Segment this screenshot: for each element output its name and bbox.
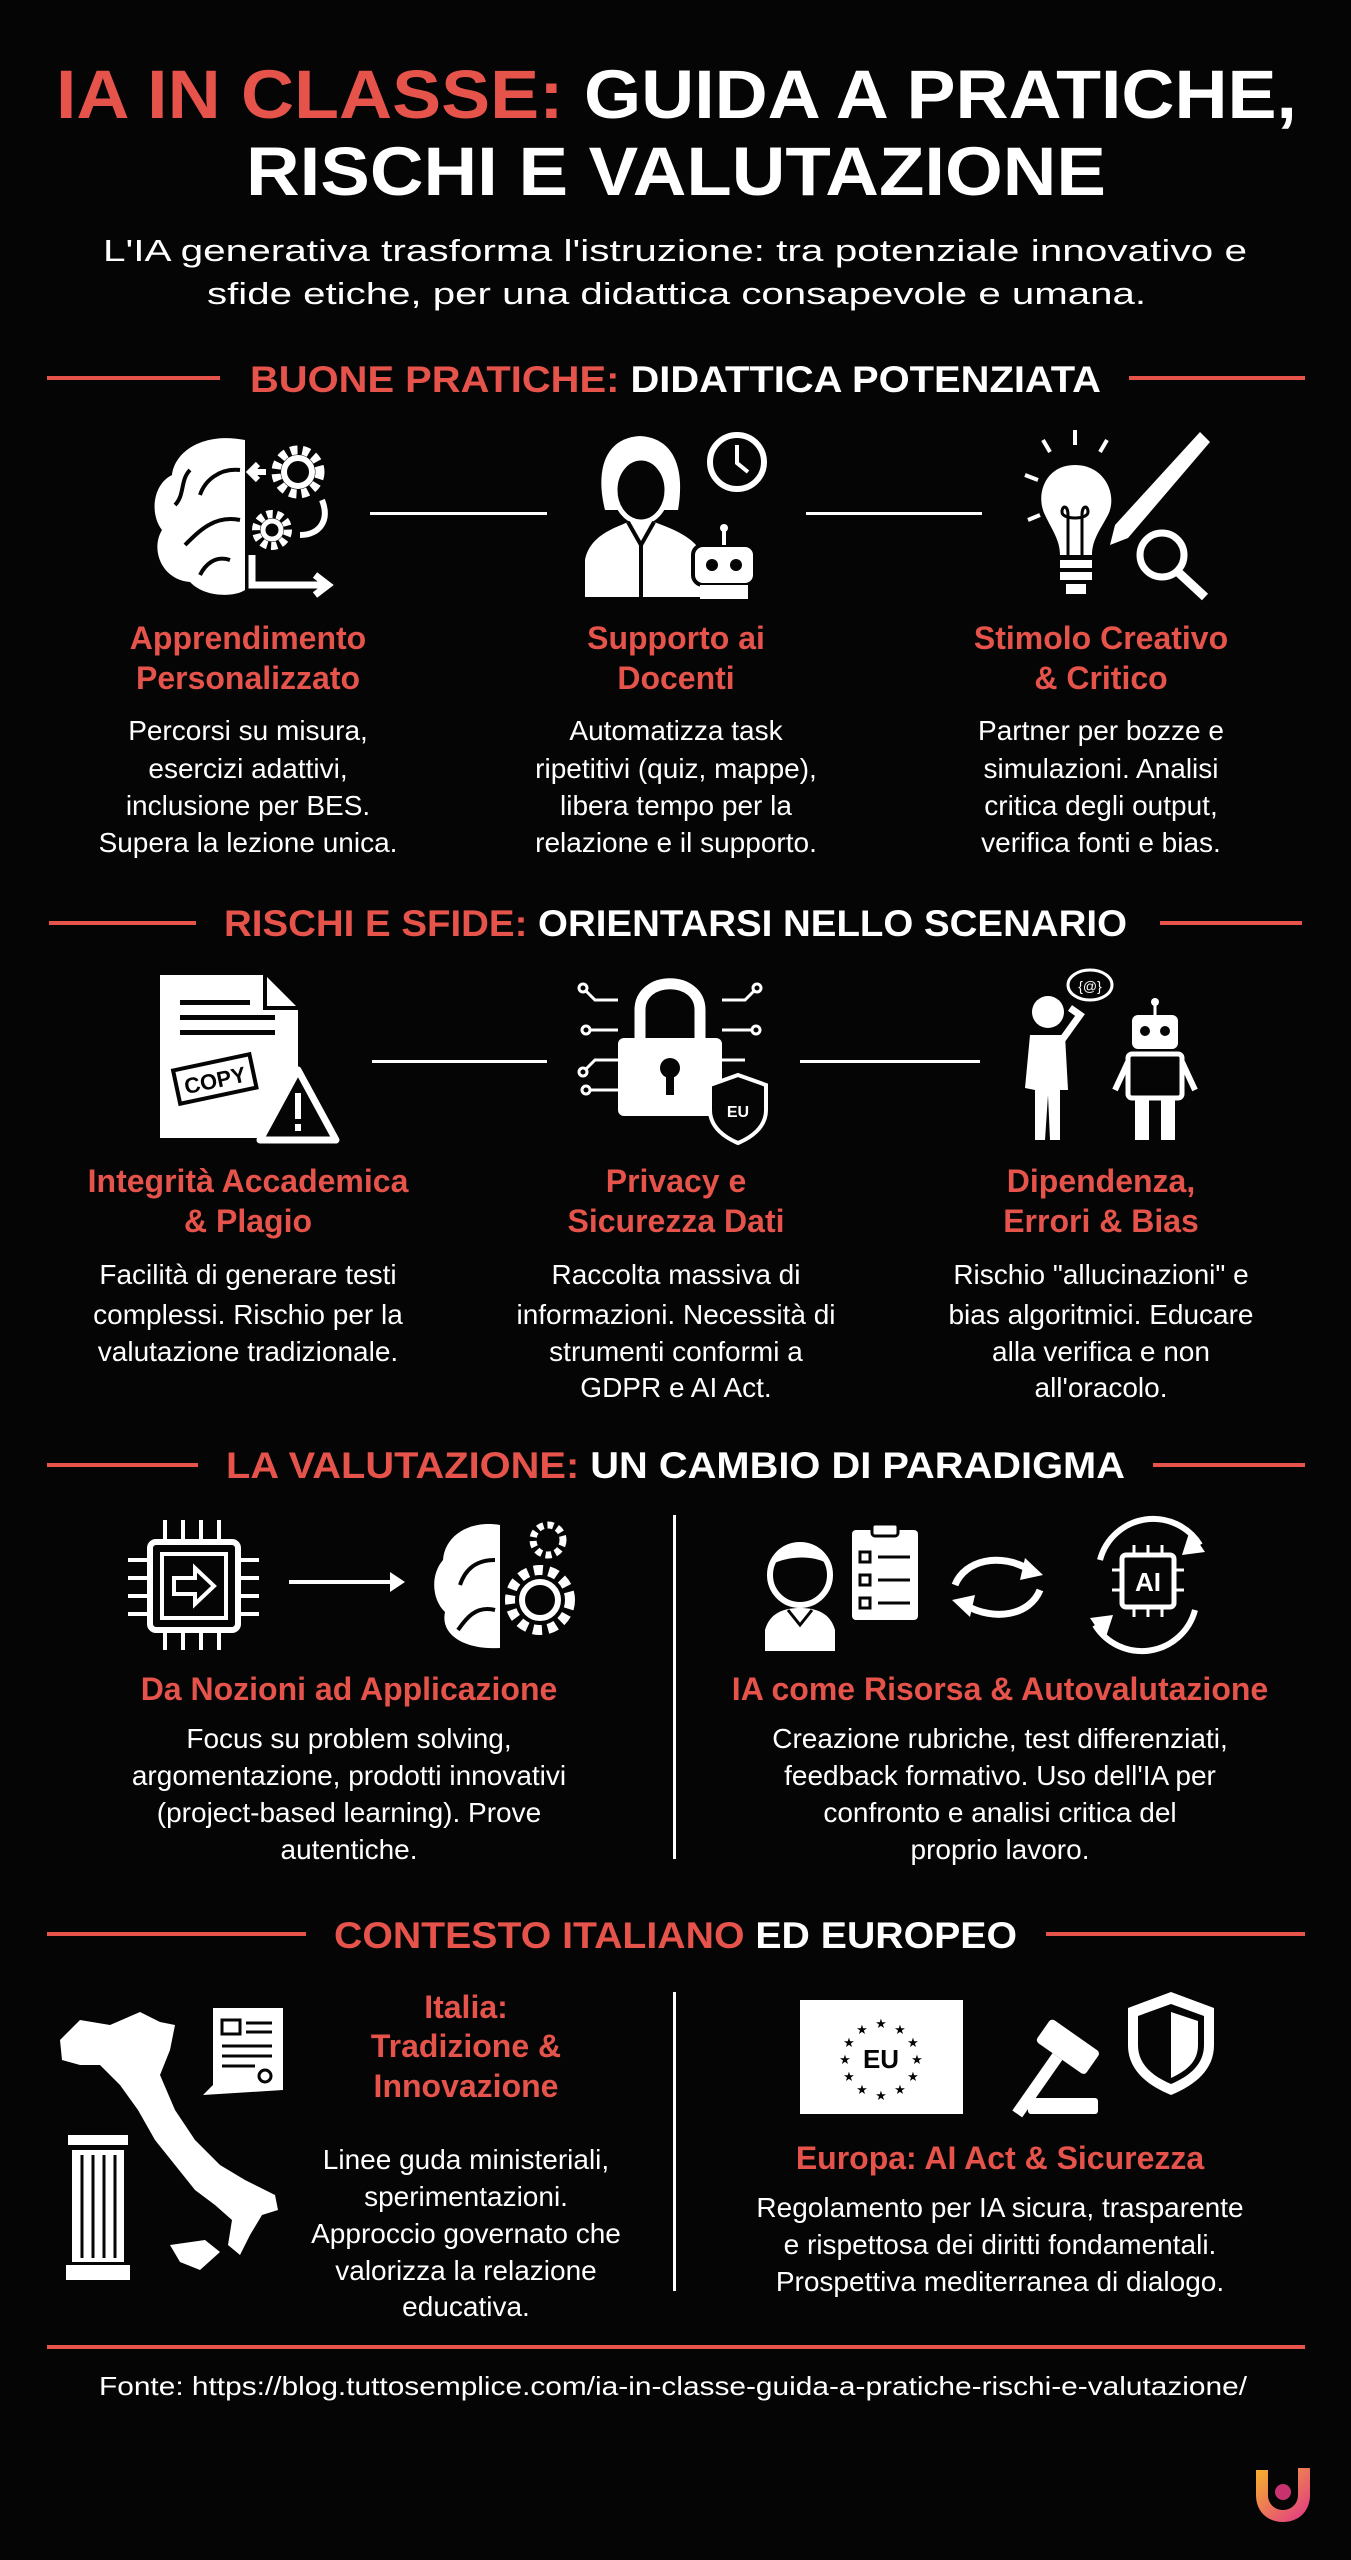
- column: stimolo creativo: Partner per bozze e: [978, 715, 1224, 746]
- column: privacy: Sicurezza Dati: [568, 1203, 784, 1239]
- icon: EU flag gavel shield: ★: [843, 2035, 855, 2050]
- column: integrità accademica: Facilità di generare testi: [99, 1259, 397, 1290]
- icon: student checklist cycle AI: AI: [1135, 1567, 1161, 1597]
- section heading: valutazione: LA VALUTAZIONE: UN CAMBIO DI PARADIGMA: [226, 1445, 1125, 1486]
- icon: padlock circuit EU: EU: [727, 1104, 749, 1121]
- column: dipendenza: all'oracolo.: [1035, 1372, 1167, 1403]
- logo: [1256, 2468, 1310, 2522]
- section heading: buone pratiche: [47, 359, 1305, 400]
- section heading: rischi e sfide: RISCHI E SFIDE: ORIENTARSI NELLO SCENARIO: [224, 903, 1127, 944]
- section heading: contesto: [47, 1915, 1305, 1956]
- column: dipendenza: [948, 1163, 1254, 1403]
- section heading: contesto: CONTESTO ITALIANO ED EUROPEO: [334, 1915, 1017, 1956]
- column: apprendimento personalizzato: Personalizzato: [136, 660, 360, 696]
- column: privacy: Privacy e: [606, 1163, 746, 1199]
- column: dipendenza: alla verifica e non: [992, 1336, 1210, 1367]
- column: IA come risorsa: Creazione rubriche, test differenziati,: [772, 1723, 1228, 1754]
- column: stimolo creativo: [974, 620, 1228, 858]
- icon: EU flag gavel shield: ★: [875, 2016, 887, 2031]
- icon: confused person and robot: [1025, 970, 1195, 1140]
- icon: chip arrow brain: [128, 1520, 570, 1650]
- column: europa: [756, 2140, 1244, 2297]
- icon: EU flag gavel shield: ★: [894, 2082, 906, 2097]
- title: IA IN CLASSE: GUIDA A PRATICHE,: [56, 56, 1297, 133]
- icon: EU flag gavel shield: ★: [856, 2082, 868, 2097]
- column: integrità accademica: & Plagio: [184, 1203, 312, 1239]
- column: dipendenza: bias algoritmici. Educare: [948, 1299, 1254, 1330]
- column: apprendimento personalizzato: esercizi adattivi,: [148, 753, 348, 784]
- column: integrità accademica: Integrità Accademica: [88, 1163, 409, 1199]
- column: IA come risorsa: IA come Risorsa & Autovalutazione: [732, 1671, 1268, 1707]
- connector: [800, 1060, 980, 1063]
- column: apprendimento personalizzato: [99, 620, 397, 858]
- column: IA come risorsa: [732, 1671, 1268, 1865]
- subtitle: L'IA generativa trasforma l'istruzione: tra potenziale innovativo e: [103, 233, 1247, 268]
- section heading: valutazione: [47, 1445, 1305, 1486]
- icon: lightbulb pencil magnifier: [1025, 430, 1210, 597]
- column: supporto ai docenti: [535, 620, 817, 858]
- icon: brain with gears: [155, 438, 328, 595]
- column: apprendimento personalizzato: inclusione per BES.: [126, 790, 370, 821]
- column: dipendenza: Errori & Bias: [1003, 1203, 1199, 1239]
- icon: EU flag gavel shield: ★: [907, 2035, 919, 2050]
- column: italia: Approccio governato che: [311, 2218, 621, 2249]
- column: italia: Tradizione &: [371, 2028, 561, 2064]
- icon: copy document warning: [160, 975, 336, 1140]
- icon: teacher with robot and clock: [585, 435, 764, 599]
- column: stimolo creativo: verifica fonti e bias.: [981, 827, 1221, 858]
- column: italia: sperimentazioni.: [364, 2181, 568, 2212]
- column: italia: valorizza la relazione: [335, 2255, 597, 2286]
- column: italia: [311, 1989, 621, 2322]
- column: privacy: informazioni. Necessità di: [516, 1299, 836, 1330]
- column: IA come risorsa: confronto e analisi critica del: [823, 1797, 1177, 1828]
- column: supporto ai docenti: libera tempo per la: [560, 790, 792, 821]
- column: italia: educativa.: [402, 2291, 530, 2322]
- column: privacy: GDPR e AI Act.: [580, 1372, 772, 1403]
- icon: confused person and robot: {@}: [1078, 978, 1102, 994]
- icon: EU flag gavel shield: ★: [911, 2052, 923, 2067]
- column: dipendenza: Rischio "allucinazioni" e: [953, 1259, 1249, 1290]
- icon: padlock circuit EU: [579, 984, 766, 1143]
- icon: EU flag gavel shield: [800, 1992, 1214, 2133]
- subtitle: sfide etiche, per una didattica consapevole e umana.: [207, 276, 1146, 311]
- column: italia: Italia:: [424, 1989, 508, 2025]
- column: da nozioni ad applicazione: [132, 1671, 566, 1865]
- column: supporto ai docenti: ripetitivi (quiz, mappe),: [535, 753, 817, 784]
- column: IA come risorsa: feedback formativo. Uso dell'IA per: [784, 1760, 1216, 1791]
- connector: [372, 1060, 547, 1063]
- icon: italy map column scroll: [60, 2008, 283, 2280]
- column: privacy: [516, 1163, 836, 1403]
- icon: EU flag gavel shield: ★: [843, 2069, 855, 2084]
- column: stimolo creativo: simulazioni. Analisi: [984, 753, 1218, 784]
- column: integrità accademica: [88, 1163, 409, 1367]
- column: apprendimento personalizzato: Supera la lezione unica.: [99, 827, 397, 858]
- column: privacy: Raccolta massiva di: [552, 1259, 800, 1290]
- title: [56, 56, 1297, 210]
- icon: EU flag gavel shield: ★: [907, 2069, 919, 2084]
- column: da nozioni ad applicazione: argomentazione, prodotti innovativi: [132, 1760, 566, 1791]
- section heading: buone pratiche: BUONE PRATICHE: DIDATTICA POTENZIATA: [250, 359, 1101, 400]
- column: supporto ai docenti: Supporto ai: [587, 620, 765, 656]
- icon: EU flag gavel shield: EU: [863, 2044, 899, 2074]
- column: italia: Innovazione: [374, 2068, 558, 2104]
- column: dipendenza: Dipendenza,: [1007, 1163, 1195, 1199]
- column: apprendimento personalizzato: Percorsi su misura,: [128, 715, 368, 746]
- icon: copy document warning: COPY: [182, 1062, 249, 1099]
- column: da nozioni ad applicazione: Da Nozioni ad Applicazione: [141, 1671, 557, 1707]
- column: supporto ai docenti: Automatizza task: [569, 715, 784, 746]
- subtitle: [103, 233, 1247, 311]
- connector: [370, 512, 547, 515]
- column: integrità accademica: complessi. Rischio per la: [93, 1299, 403, 1330]
- column: apprendimento personalizzato: Apprendimento: [130, 620, 366, 656]
- column: italia: Linee guda ministeriali,: [323, 2144, 609, 2175]
- icon: student checklist cycle AI: [765, 1519, 1205, 1651]
- column: da nozioni ad applicazione: Focus su problem solving,: [186, 1723, 512, 1754]
- icon: EU flag gavel shield: ★: [875, 2088, 887, 2103]
- column: da nozioni ad applicazione: (project-based learning). Prove: [157, 1797, 541, 1828]
- column: stimolo creativo: & Critico: [1034, 660, 1168, 696]
- column: da nozioni ad applicazione: autentiche.: [280, 1834, 418, 1865]
- icon: EU flag gavel shield: ★: [894, 2022, 906, 2037]
- column: europa: e rispettosa dei diritti fondamentali.: [784, 2229, 1216, 2260]
- title: RISCHI E VALUTAZIONE: [246, 133, 1106, 210]
- column: integrità accademica: valutazione tradizionale.: [98, 1336, 398, 1367]
- column: supporto ai docenti: Docenti: [617, 660, 735, 696]
- connector: [806, 512, 982, 515]
- column: europa: Prospettiva mediterranea di dialogo.: [776, 2266, 1224, 2297]
- icon: EU flag gavel shield: ★: [839, 2052, 851, 2067]
- column: privacy: strumenti conformi a: [549, 1336, 803, 1367]
- source footer: Fonte: https://blog.tuttosemplice.com/ia-in-classe-guida-a-pratiche-rischi-e-valutazione/: [99, 2371, 1248, 2401]
- column: stimolo creativo: critica degli output,: [984, 790, 1218, 821]
- column: supporto ai docenti: relazione e il supporto.: [535, 827, 817, 858]
- icon: EU flag gavel shield: ★: [856, 2022, 868, 2037]
- column: stimolo creativo: Stimolo Creativo: [974, 620, 1228, 656]
- column: IA come risorsa: proprio lavoro.: [911, 1834, 1089, 1865]
- column: europa: Regolamento per IA sicura, trasparente: [756, 2192, 1244, 2223]
- column: europa: Europa: AI Act & Sicurezza: [796, 2140, 1204, 2176]
